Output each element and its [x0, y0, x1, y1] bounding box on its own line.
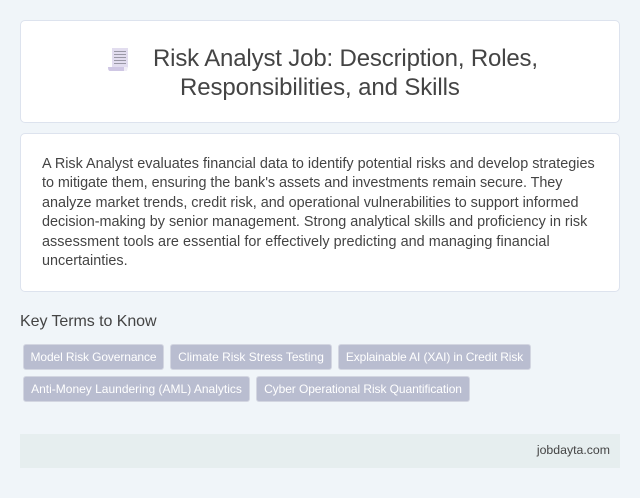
description paragraph: uncertainties.	[42, 253, 128, 269]
tag: Model Risk Governance	[31, 350, 156, 364]
tag list	[23, 344, 531, 402]
tag	[338, 344, 531, 370]
icon: document	[108, 48, 128, 71]
tag	[23, 376, 250, 402]
footer source: jobdayta.com	[537, 443, 610, 457]
tag	[23, 344, 164, 370]
description paragraph: A Risk Analyst evaluates financial data to identify potential risks and develop strategies	[42, 156, 595, 172]
description paragraph: assessment tools are essential for effectively predicting and managing financial	[42, 234, 550, 250]
tag	[256, 376, 470, 402]
title line 2: Responsibilities, and Skills	[180, 74, 460, 101]
description paragraph: decision-making by senior management. Strong analytical skills and proficiency in risk	[42, 214, 587, 230]
tag: Cyber Operational Risk Quantification	[264, 382, 462, 396]
tag: Explainable AI (XAI) in Credit Risk	[346, 350, 523, 364]
tag: Climate Risk Stress Testing	[178, 350, 324, 364]
footer bar	[20, 434, 620, 468]
panel: title card	[20, 20, 620, 123]
tag: Anti-Money Laundering (AML) Analytics	[31, 382, 242, 396]
description paragraph: to mitigate them, ensuring the bank's assets and investments remain secure. They	[42, 175, 562, 191]
title line 1: Risk Analyst Job: Description, Roles,	[153, 45, 538, 72]
description paragraph	[42, 156, 595, 269]
description paragraph: analyze market trends, credit risk, and operational vulnerabilities to support informed	[42, 195, 578, 211]
heading: key terms: Key Terms to Know	[20, 313, 157, 330]
panel: description	[20, 133, 620, 292]
tag	[170, 344, 332, 370]
